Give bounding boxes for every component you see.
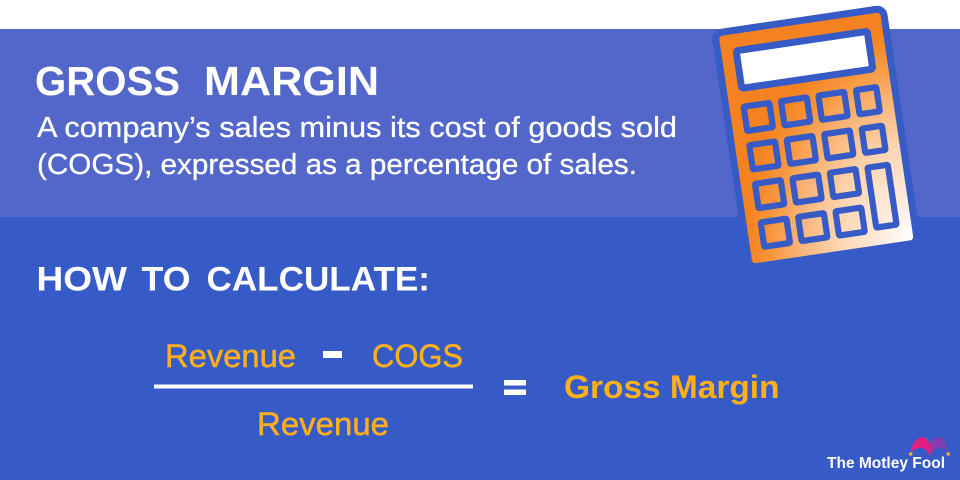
- logo: the motley fool: [827, 437, 950, 472]
- icon: calculator: [715, 8, 918, 268]
- formula: [154, 338, 780, 442]
- equals sign: [504, 380, 526, 395]
- panel: header band: [0, 29, 960, 217]
- heading: how to calculate: [36, 260, 430, 298]
- fraction bar: [154, 384, 473, 388]
- heading: how to calculate: TO: [142, 260, 190, 298]
- minus sign: [323, 351, 342, 358]
- panel: lower background: [0, 217, 960, 480]
- definition text: (COGS), expressed as a percentage of sales.: [37, 149, 637, 181]
- icon: jester hat: [909, 437, 950, 457]
- heading: how to calculate: HOW: [36, 260, 128, 298]
- logo wordmark: The Motley Fool: [827, 455, 945, 472]
- heading: how to calculate: CALCULATE:: [206, 260, 430, 298]
- definition text: A company’s sales minus its cost of goods sold: [37, 112, 677, 144]
- definition text: [37, 112, 677, 181]
- title: GROSS: [35, 58, 180, 104]
- result: gross margin: Gross Margin: [564, 369, 780, 405]
- denominator: revenue: Revenue: [257, 406, 389, 442]
- title: MARGIN: [204, 58, 379, 104]
- numerator: revenue: Revenue: [165, 338, 296, 374]
- numerator: cogs: COGS: [372, 338, 463, 374]
- title: [35, 58, 379, 104]
